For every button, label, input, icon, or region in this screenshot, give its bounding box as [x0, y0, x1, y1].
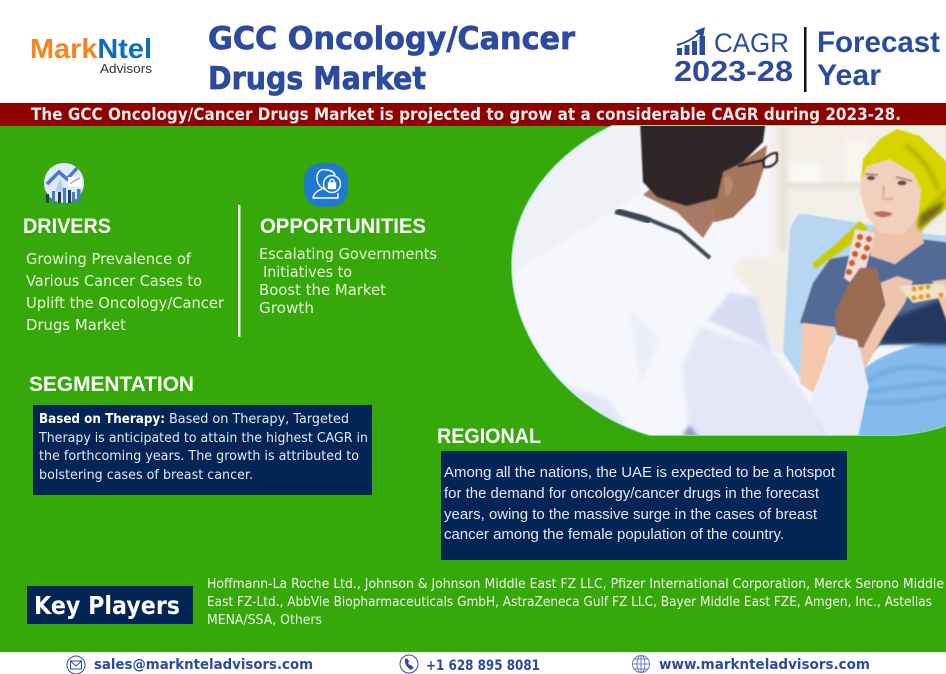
- icon: growth bars with arrow: [677, 27, 705, 55]
- regional heading: REGIONAL: [437, 425, 541, 448]
- segmentation text: Therapy is anticipated to attain the highest CAGR in: [38, 431, 368, 446]
- regional text: [444, 465, 835, 543]
- segmentation text: [38, 412, 368, 483]
- doctor ear and face: [712, 145, 767, 222]
- website: www.marknteladvisors.com: [659, 657, 870, 673]
- glasses: [738, 153, 777, 167]
- panel: segmentation: [29, 373, 372, 495]
- patient arm: [800, 323, 835, 393]
- phone number: +1 628 895 8081: [426, 658, 540, 674]
- regional text: for the demand for oncology/cancer drugs in the forecast: [444, 486, 819, 502]
- logo: MarkNtel Advisors: Advisors: [100, 61, 153, 76]
- pill blister held by patient: [898, 283, 946, 303]
- key players list: MENA/SSA, Others: [207, 613, 322, 628]
- drivers text: Uplift the Oncology/Cancer: [26, 294, 225, 312]
- divider between drivers and opportunities: [238, 205, 240, 337]
- doctor hand: [835, 268, 885, 348]
- patient scarf: [861, 129, 946, 232]
- segmentation text: Based on Therapy, Targeted: [169, 412, 349, 427]
- title: GCC Oncology/Cancer: [208, 21, 576, 57]
- icon: person with padlock: [304, 163, 348, 207]
- segmentation heading: SEGMENTATION: [29, 373, 194, 396]
- regional text box: [441, 451, 847, 560]
- key players badge: Key Players: [34, 591, 180, 620]
- drivers text: Growing Prevalence of: [26, 250, 192, 268]
- regional text: years, owing to the massive surge in the cases of breast: [444, 507, 817, 523]
- patient shirt: [800, 239, 946, 365]
- email address: sales@marknteladvisors.com: [94, 657, 313, 673]
- title: Drugs Market: [208, 61, 426, 97]
- opportunities text: Boost the Market: [259, 281, 386, 299]
- opportunities text: Escalating Governments: [259, 245, 437, 263]
- forecast year label: Year: [817, 59, 881, 92]
- panel: key players: [27, 577, 944, 628]
- CAGR label: CAGR: [714, 28, 789, 58]
- patient neck: [870, 215, 924, 264]
- drivers text: [26, 250, 225, 334]
- icon: globe: [632, 656, 650, 672]
- drivers heading: DRIVERS: [23, 215, 111, 238]
- header: [30, 21, 940, 97]
- doctor cuff: [810, 335, 868, 440]
- doctor coat: [512, 278, 869, 435]
- opportunities text: Initiatives to: [263, 263, 352, 281]
- segmentation text: the forthcoming years. The growth is attributed to: [39, 449, 359, 464]
- CAGR years: 2023-28: [674, 56, 793, 88]
- pill blister held by doctor: [844, 229, 875, 288]
- icon: drivers growth globe: [44, 163, 84, 203]
- chair: [735, 256, 790, 355]
- patient face: [860, 157, 921, 235]
- doctor neck: [642, 188, 756, 238]
- pillow: [783, 214, 946, 378]
- opportunities heading: OPPORTUNITIES: [260, 215, 426, 238]
- key players list: [207, 577, 944, 628]
- icon: phone: [400, 655, 418, 673]
- regional text: Among all the nations, the UAE is expected to be a hotspot: [444, 465, 835, 481]
- patient scarf tail: [812, 221, 868, 269]
- forecast year label: [817, 26, 940, 92]
- panel: regional: [437, 425, 847, 560]
- segmentation text: bolstering cases of breast cancer.: [39, 468, 253, 483]
- segmentation text: Based on Therapy:: [39, 412, 165, 427]
- icon: email: [67, 656, 85, 674]
- logo: MarkNtel Advisors: MarkNtel: [30, 33, 152, 64]
- opportunities text: Growth: [259, 299, 314, 317]
- drivers text: Drugs Market: [26, 316, 126, 334]
- drivers text: Various Cancer Cases to: [26, 272, 202, 290]
- panel: drivers: [23, 163, 225, 334]
- stethoscope: [615, 212, 710, 258]
- title: [208, 21, 576, 97]
- photo: doctor showing pills to patient: [505, 120, 946, 440]
- segmentation text box: [33, 405, 372, 495]
- regional text: cancer among the female population of the country.: [444, 527, 784, 543]
- divider: [804, 27, 806, 92]
- panel: opportunities: [259, 163, 437, 317]
- doctor hair: [640, 120, 766, 206]
- forecast year label: Forecast: [817, 26, 940, 59]
- background: green panel: [0, 126, 946, 652]
- footer contacts: [0, 652, 946, 674]
- blanket: [858, 342, 946, 435]
- wall and shelves: [505, 120, 946, 440]
- opportunities text: [259, 245, 437, 317]
